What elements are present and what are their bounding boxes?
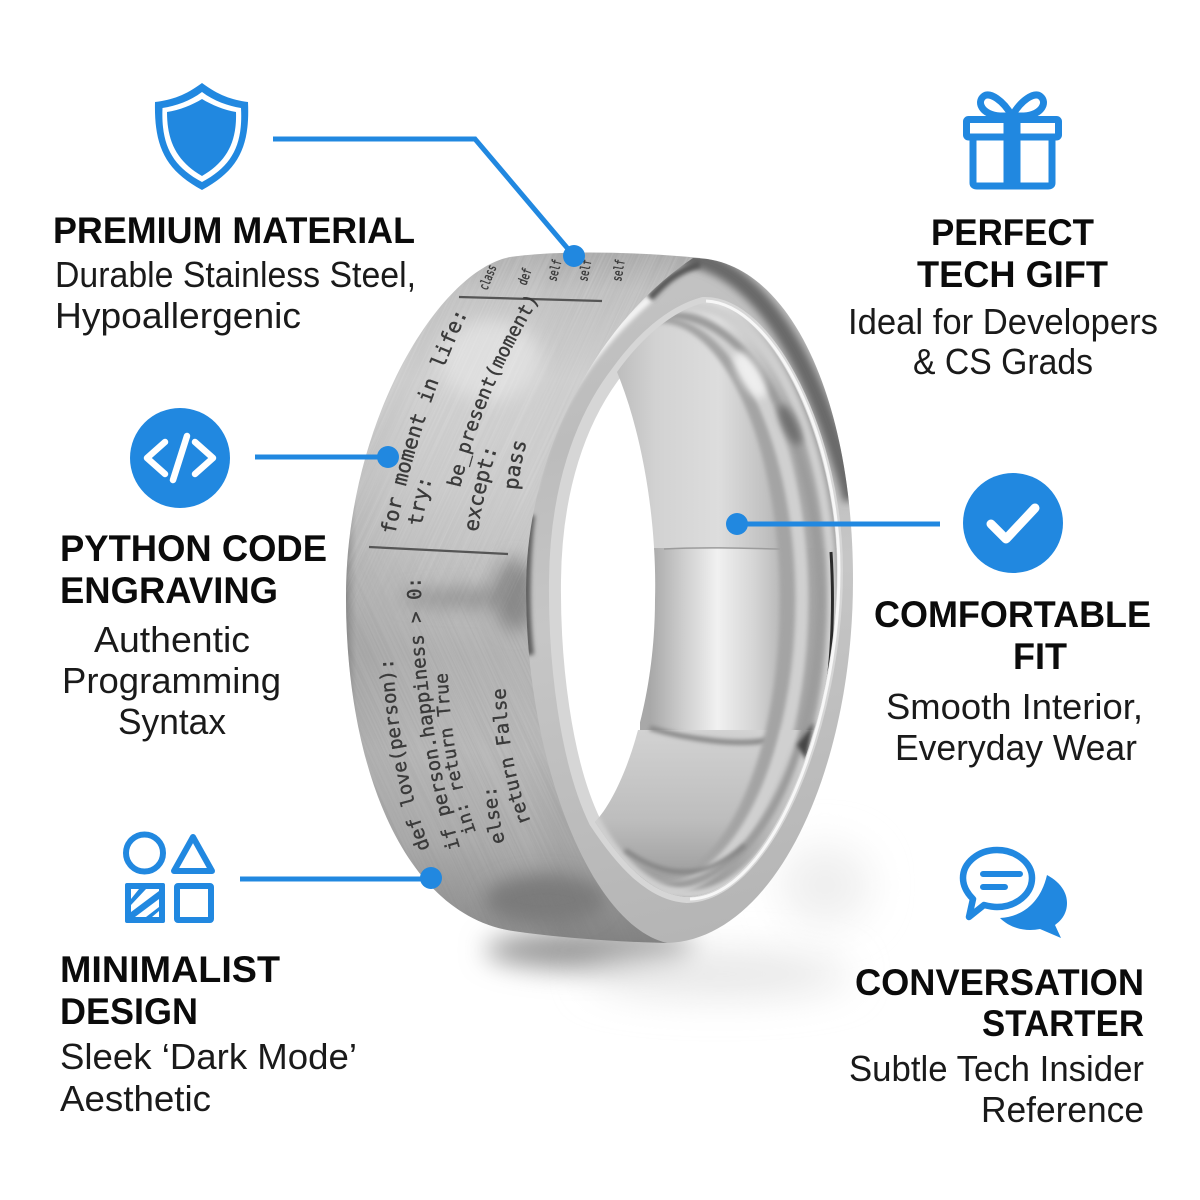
ring band outer surface	[346, 252, 700, 943]
description: conversation starter: Reference	[981, 1089, 1144, 1130]
engraved code: for moment in life: try:	[408, 480, 432, 524]
description: perfect tech gift: Ideal for Developers	[848, 301, 1158, 342]
panel: comfortable fit	[726, 473, 1151, 768]
engraved code: for moment in life: pass	[506, 441, 526, 489]
heading: minimalist design	[60, 949, 280, 1032]
description: python code engraving	[62, 619, 281, 742]
engraved code: top fragments: self	[545, 258, 566, 283]
engraved code: for moment in life	[381, 297, 538, 532]
icon: chat bubbles	[963, 850, 1067, 938]
icon: check circle	[963, 473, 1063, 573]
engraved code: for moment in life: except:	[467, 449, 496, 530]
description: conversation starter: Subtle Tech Insider	[849, 1048, 1144, 1089]
icon: gift box	[966, 95, 1058, 189]
engraving dividers	[369, 297, 602, 554]
description: premium material: Hypoallergenic	[55, 295, 301, 336]
description: perfect tech gift: & CS Grads	[913, 341, 1093, 382]
heading: conversation starter: CONVERSATION	[855, 962, 1144, 1003]
engraved code: def love: in: return True	[436, 674, 476, 834]
heading: python code engraving: PYTHON CODE	[60, 528, 327, 569]
ring front rim	[526, 256, 853, 943]
panel: perfect tech gift	[848, 95, 1158, 382]
heading: comfortable fit	[874, 594, 1151, 677]
heading: perfect tech gift: TECH GIFT	[917, 254, 1108, 295]
engraved code: def love: return False	[492, 689, 530, 823]
description: python code engraving: Syntax	[118, 701, 226, 742]
heading: python code engraving: ENGRAVING	[60, 570, 278, 611]
engraved code: top fragments	[477, 258, 629, 292]
engraved code: def love: else:	[486, 790, 504, 843]
description: premium material	[55, 254, 416, 336]
engraved code: top fragments: self	[610, 258, 629, 283]
heading: perfect tech gift	[917, 212, 1108, 295]
engraved code: def love: if person.happiness > 0:	[406, 581, 460, 849]
description: comfortable fit	[886, 686, 1143, 768]
heading: minimalist design: MINIMALIST	[60, 949, 280, 990]
description: premium material: Durable Stainless Steel,	[55, 254, 416, 295]
heading: minimalist design: DESIGN	[60, 991, 198, 1032]
engraved code: top fragments: def	[516, 266, 536, 287]
description: minimalist design: Sleek ‘Dark Mode’	[60, 1036, 357, 1077]
connector: shield to ring top	[273, 139, 585, 267]
connector: check icon to inner surface	[726, 513, 940, 535]
engraved code: top fragments: class	[477, 263, 500, 292]
description: conversation starter	[849, 1048, 1144, 1130]
icon: code brackets	[130, 408, 230, 508]
steel ring with engraved code	[346, 252, 853, 943]
panel: premium material	[53, 83, 585, 336]
connector: shapes to ring	[240, 867, 442, 889]
engraved code: for moment in life: be_present(moment)	[446, 297, 538, 486]
description: comfortable fit: Everyday Wear	[895, 727, 1137, 768]
description: comfortable fit: Smooth Interior,	[886, 686, 1143, 727]
description: perfect tech gift	[848, 301, 1158, 382]
panel: conversation starter	[849, 850, 1144, 1130]
panel: minimalist design	[60, 834, 442, 1119]
description: minimalist design	[60, 1036, 357, 1119]
heading: comfortable fit: COMFORTABLE	[874, 594, 1151, 635]
heading: python code engraving	[60, 528, 327, 611]
icon: shield	[155, 83, 248, 190]
heading: comfortable fit: FIT	[1013, 636, 1067, 677]
engraved code: for moment in life: for moment in life:	[381, 312, 466, 532]
engraved code: def love: def love(person):	[379, 662, 429, 850]
panel: python code engraving	[60, 408, 399, 742]
ring inner surface	[595, 309, 837, 897]
description: python code engraving: Programming	[62, 660, 281, 701]
heading: premium material: PREMIUM MATERIAL	[53, 210, 415, 251]
ring shadow	[485, 845, 870, 994]
description: python code engraving: Authentic	[94, 619, 250, 660]
heading: conversation starter	[855, 962, 1144, 1044]
engraved code: top fragments: self	[576, 258, 595, 283]
description: minimalist design: Aesthetic	[60, 1078, 211, 1119]
connector: code icon to engraving	[255, 446, 399, 468]
icon: geometric shapes	[125, 834, 212, 923]
heading: conversation starter: STARTER	[982, 1003, 1144, 1044]
heading: perfect tech gift: PERFECT	[931, 212, 1094, 253]
engraved code: def love	[379, 581, 530, 850]
